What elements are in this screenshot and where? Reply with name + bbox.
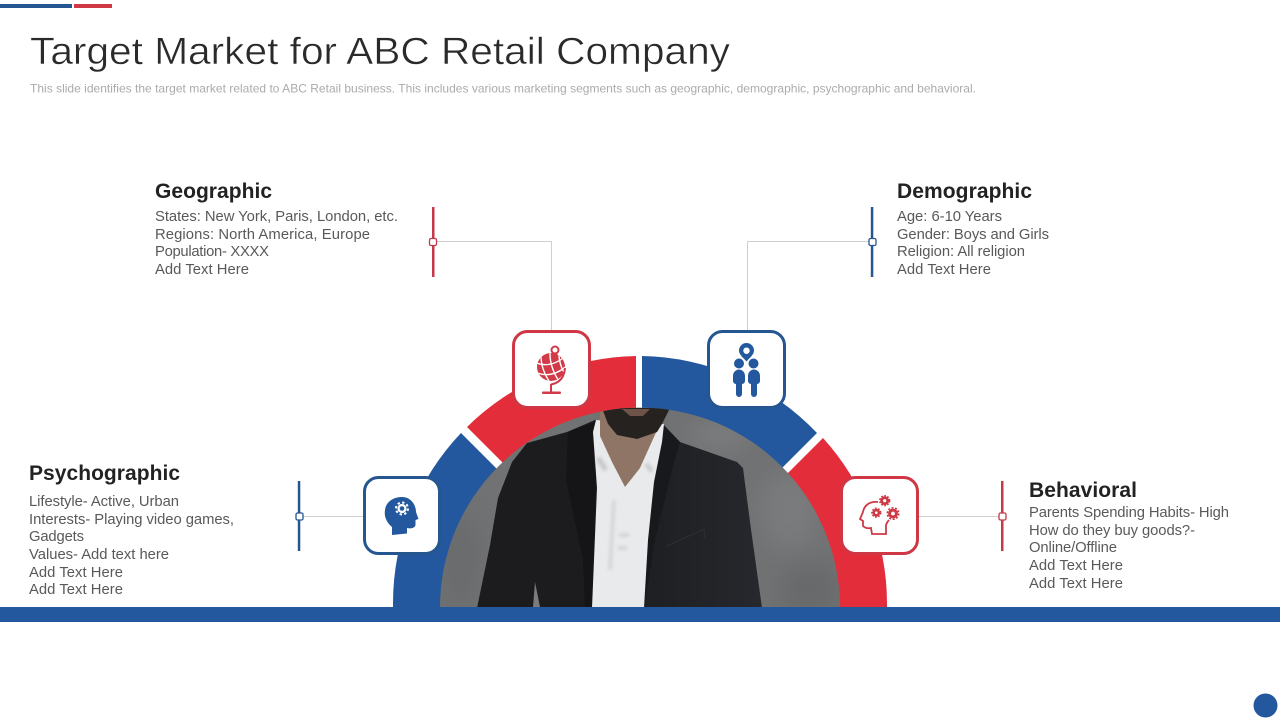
- text block: geographic: Population- XXXX: [155, 244, 269, 260]
- photo: man in black blazer: [440, 400, 840, 616]
- title: Target Market for ABC Retail Company: [30, 31, 730, 73]
- text block: geographic: Add Text Here: [155, 262, 249, 278]
- text block: psychographic: Add Text Here: [29, 582, 123, 598]
- card: behavioral icon: [842, 478, 918, 554]
- text block: psychographic: Add Text Here: [29, 565, 123, 581]
- shirt: [592, 420, 664, 608]
- text block: geographic: Regions: North America, Europe: [155, 227, 370, 243]
- panel: demographic text: [897, 180, 1049, 278]
- panel: psychographic text: [29, 462, 234, 598]
- page number dot: [1254, 694, 1278, 718]
- text block: demographic: Gender: Boys and Girls: [897, 227, 1049, 243]
- icon: head outline with gears: [860, 496, 899, 534]
- neck: [600, 410, 660, 487]
- icon: globe with pin: [537, 346, 566, 394]
- heading: behavioral: Behavioral: [1029, 479, 1137, 502]
- text block: geographic: [155, 209, 398, 278]
- lapel shadow: [568, 426, 596, 597]
- text block: demographic: Age: 6-10 Years: [897, 209, 1002, 225]
- panel: geographic text: [155, 180, 398, 278]
- text block: demographic: Religion: All religion: [897, 244, 1025, 260]
- subtitle: This slide identifies the target market related to ABC Retail business. This includes various marketing segments such as geographic, demographic, psychographic and behavioral.: [30, 82, 976, 96]
- segment: demographic blue: [642, 356, 817, 608]
- card: demographic icon: [708, 332, 784, 408]
- text block: demographic: Add Text Here: [897, 262, 991, 278]
- text block: geographic: States: New York, Paris, London, etc.: [155, 209, 398, 225]
- beard: [602, 408, 670, 439]
- heading: demographic: Demographic: [897, 180, 1032, 203]
- icon: head with gear: [385, 497, 418, 535]
- text block: behavioral: How do they buy goods?-: [1029, 523, 1195, 539]
- text block: psychographic: Values- Add text here: [29, 547, 169, 563]
- heading: psychographic: Psychographic: [29, 462, 180, 485]
- text block: behavioral: Add Text Here: [1029, 576, 1123, 592]
- jacket: [477, 420, 762, 608]
- text block: behavioral: [1029, 505, 1229, 592]
- segment: behavioral red: [680, 438, 887, 608]
- top accent bars: [0, 4, 112, 8]
- text block: behavioral: Parents Spending Habits- High: [1029, 505, 1229, 521]
- card: psychographic icon: [364, 478, 440, 554]
- text block: behavioral: Online/Offline: [1029, 540, 1117, 556]
- text block: behavioral: Add Text Here: [1029, 558, 1123, 574]
- text block: demographic: [897, 209, 1049, 278]
- pocket: [667, 529, 705, 546]
- lips: [622, 409, 650, 416]
- segment: psychographic blue: [393, 433, 600, 608]
- bottom band: [0, 607, 1280, 622]
- heading: geographic: Geographic: [155, 180, 272, 203]
- text block: psychographic: Interests- Playing video games,: [29, 512, 234, 528]
- panel: behavioral text: [1029, 479, 1229, 592]
- connector: demographic: [748, 207, 876, 331]
- text block: psychographic: Gadgets: [29, 529, 84, 545]
- connector: psychographic: [296, 481, 364, 551]
- arm gap: [533, 582, 540, 607]
- text block: psychographic: Lifestyle- Active, Urban: [29, 494, 179, 510]
- connector: behavioral: [918, 481, 1006, 551]
- connector: geographic: [430, 207, 552, 331]
- segment: geographic red: [467, 356, 636, 596]
- semicircle ring chart: [393, 356, 887, 608]
- shirt placket shading: [598, 458, 652, 570]
- icon: two people with pin: [733, 343, 760, 397]
- card: geographic icon: [514, 332, 590, 408]
- text block: psychographic: [29, 494, 234, 598]
